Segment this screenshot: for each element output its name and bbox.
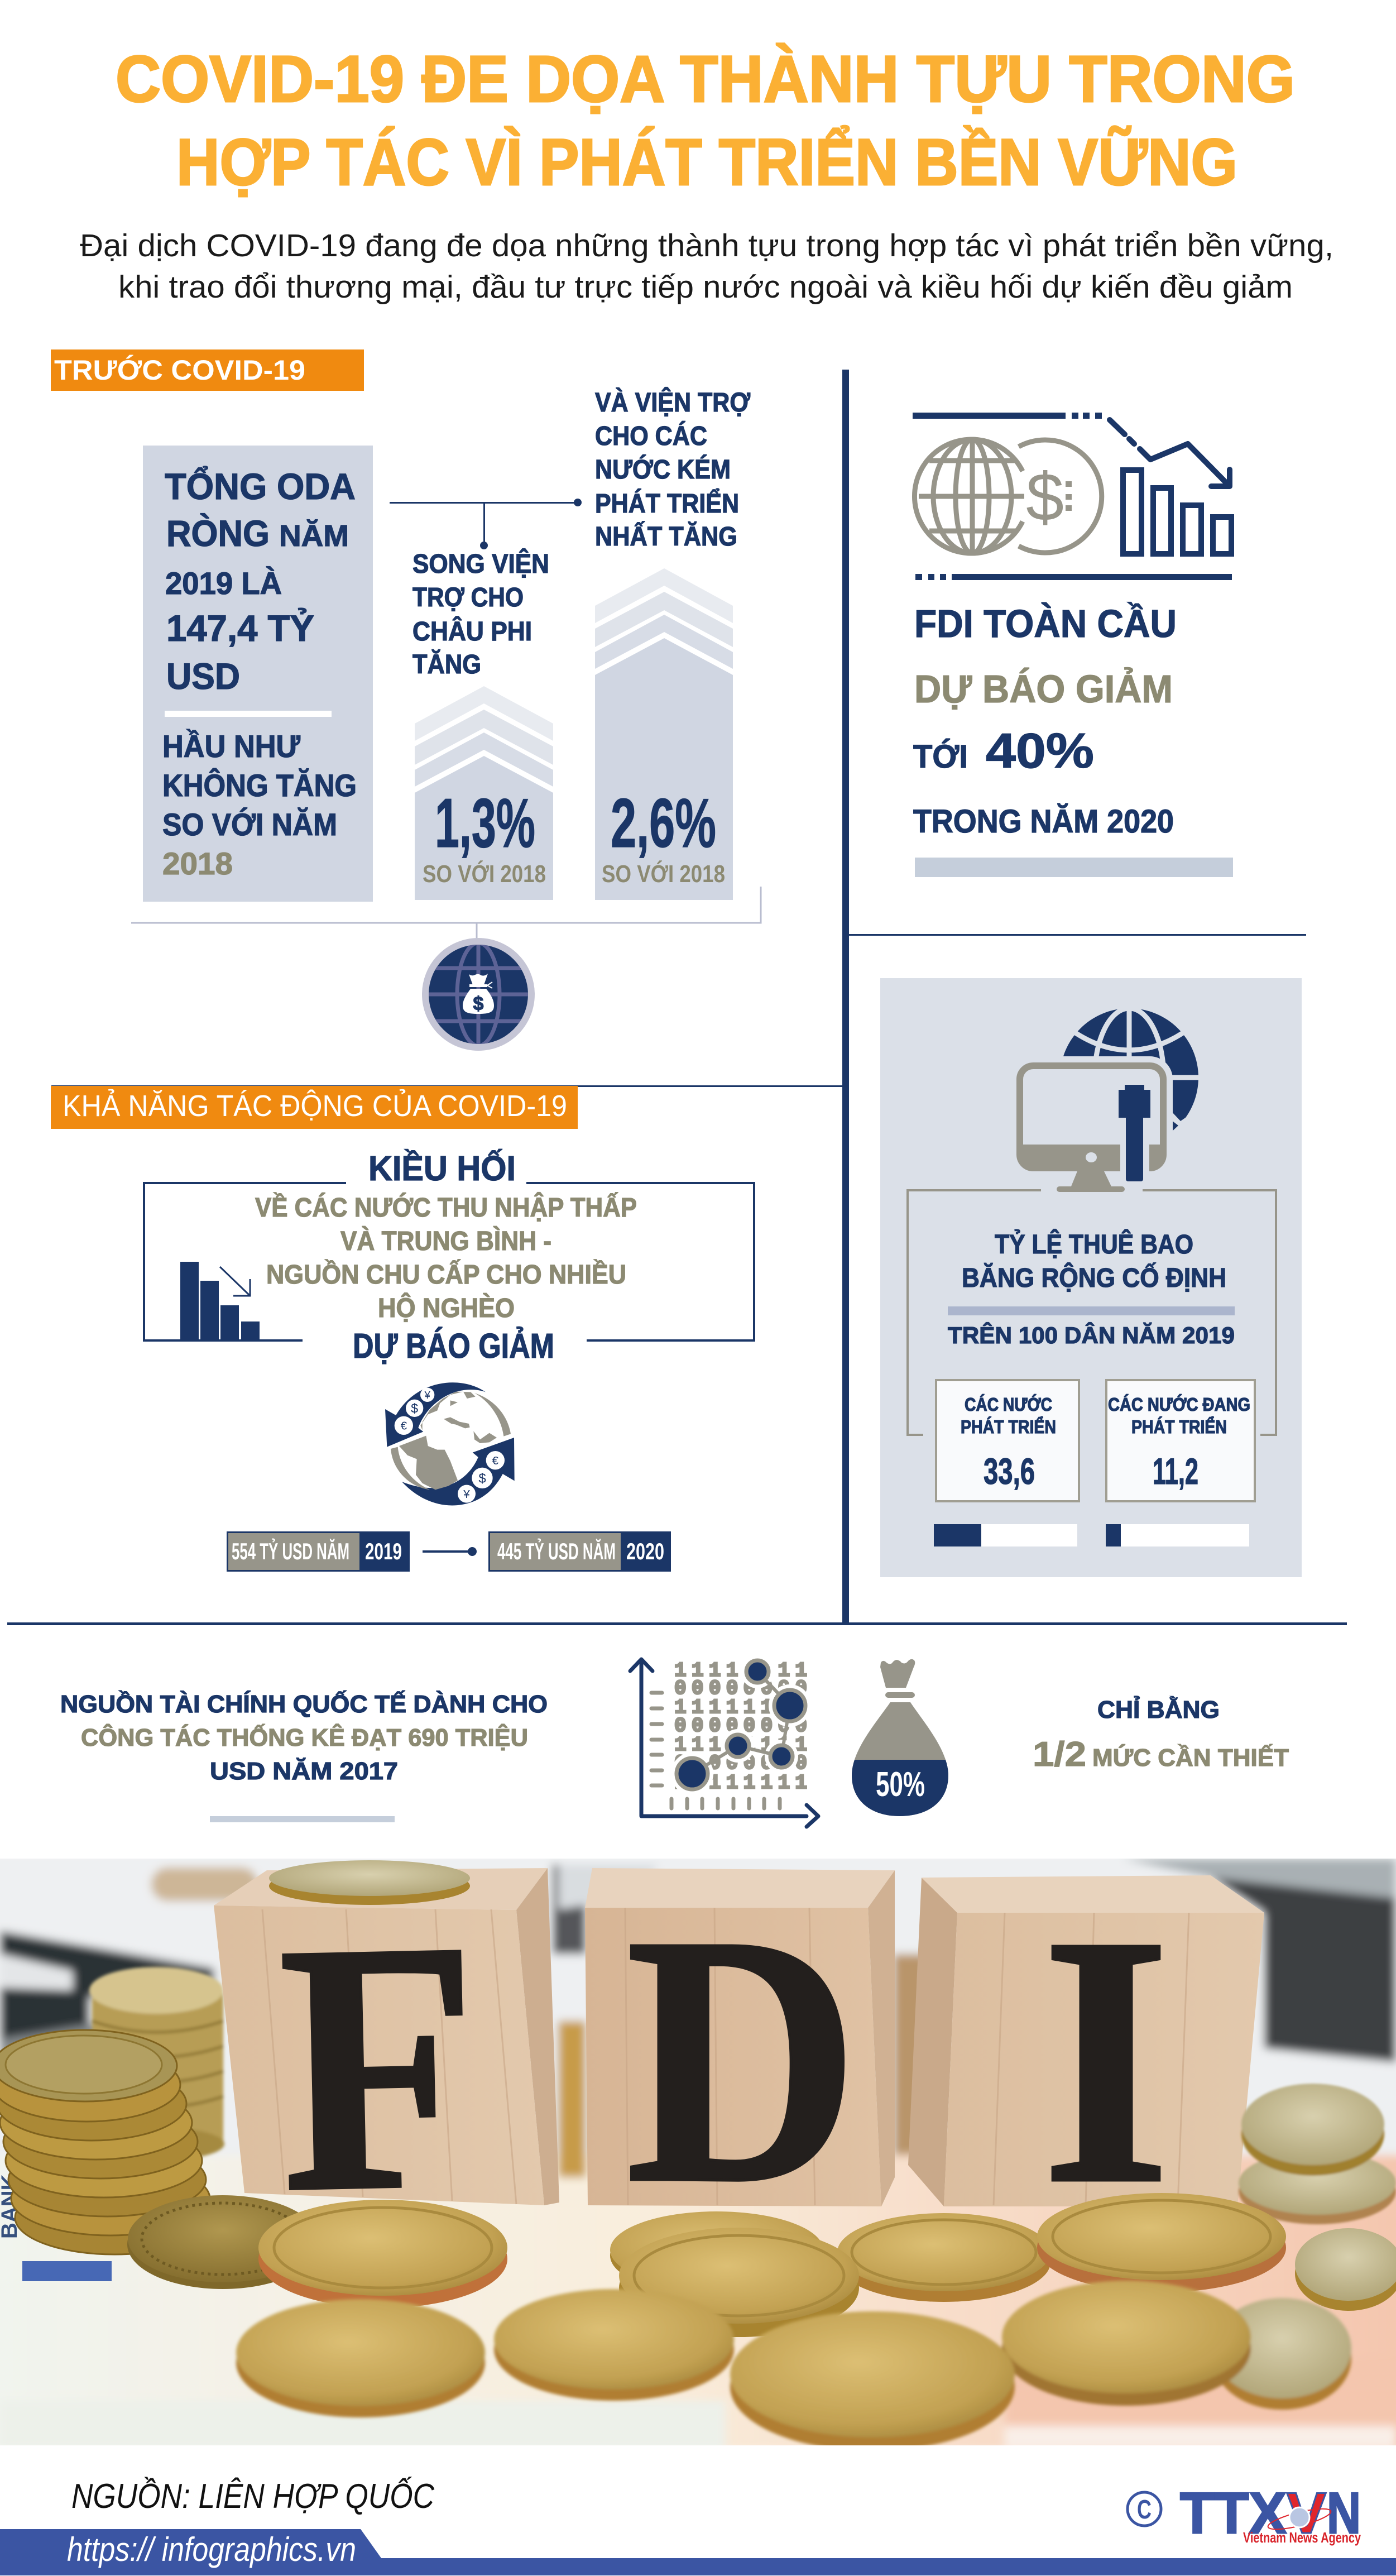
text: aid to Africa: SONG VIỆN — [412, 548, 549, 579]
icon: FDI globe, coin and falling chart: $ — [1026, 459, 1064, 535]
footer band with URL: https:// infographics.vn — [67, 2531, 356, 2568]
icon: data chart: 11111111 — [674, 1771, 807, 1794]
stat card: developing countries — [1106, 1380, 1255, 1501]
value label: 554 billion USD in 2019: 554 TỶ USD NĂM — [232, 1538, 349, 1564]
panel: fixed broadband subscriptions — [880, 978, 1302, 1577]
logo: TTXVN: Vietnam News Agency — [1243, 2529, 1361, 2546]
text: only half of what is needed: 1/2 — [1033, 1735, 1086, 1774]
panel: total ODA: TỔNG ODA — [165, 466, 356, 507]
wooden block I — [908, 1875, 1264, 2206]
connector lines with dots — [390, 499, 582, 549]
block letters: D — [626, 1862, 859, 2257]
text: international statistics funding — [60, 1689, 548, 1785]
text: global FDI forecast: TỚI — [913, 739, 968, 775]
source credit: NGUỒN: LIÊN HỢP QUỐC — [71, 2477, 435, 2516]
panel: total ODA: 147,4 TỶ — [166, 607, 314, 649]
value label: 554 billion USD in 2019: 2019 — [365, 1538, 402, 1564]
icon: globe with currency arrows: ¥ — [424, 1389, 430, 1401]
text: aid to least developed countries: CHO CÁC — [595, 421, 707, 451]
panel: total ODA: HẦU NHƯ — [162, 729, 300, 764]
text: global FDI forecast: FDI TOÀN CẦU — [914, 602, 1177, 645]
bracket under ODA panels — [131, 887, 761, 939]
left coin stack — [0, 2030, 214, 2254]
banknote detail — [22, 2261, 112, 2281]
chevron bar: 1.3%: 1,3% — [435, 785, 535, 862]
broadband heading: BĂNG RỘNG CỐ ĐỊNH — [962, 1262, 1226, 1293]
mid row coins — [127, 2193, 1396, 2337]
stat card: developed countries: CÁC NƯỚC — [965, 1394, 1052, 1415]
logo: TTXVN — [1128, 2481, 1361, 2546]
title: HỢP TÁC VÌ PHÁT TRIỂN BỀN VỮNG — [176, 125, 1237, 199]
foreground blurred coins — [236, 2281, 1351, 2451]
block letters: F — [276, 1867, 482, 2267]
wooden block D — [585, 1868, 895, 2206]
box frame: remittances — [144, 1183, 754, 1340]
icon: globe with money bag: $ — [473, 993, 484, 1014]
icon: globe with currency arrows: € — [492, 1454, 499, 1467]
icon: data chart: 00000000 — [674, 1752, 807, 1775]
broadband heading — [948, 1229, 1235, 1348]
coin on top of block — [269, 1860, 470, 1905]
stat card: developed countries — [936, 1380, 1079, 1501]
panel: total ODA: RÒNG — [166, 513, 270, 554]
main horizontal divider — [7, 1622, 1347, 1625]
main vertical divider — [842, 370, 849, 1624]
panel: total ODA: SO VỚI NĂM — [162, 807, 337, 842]
text: aid to least developed countries: NƯỚC KÉM — [595, 454, 731, 485]
panel: total ODA: 2019 LÀ — [165, 566, 282, 601]
photo background — [0, 1854, 1396, 2451]
intro text: Đại dịch COVID-19 đang đe dọa những thành tựu trong hợp tác vì phát triển bền vững, — [80, 228, 1333, 264]
text: remittances — [255, 1150, 637, 1366]
text: remittances: NGUỒN CHU CẤP CHO NHIỀU — [266, 1259, 626, 1290]
icon: data chart — [630, 1655, 818, 1827]
icon: globe with money bag — [422, 938, 535, 1051]
logo: TTXVN: C — [1137, 2495, 1152, 2525]
wooden block F — [214, 1868, 559, 2205]
chevron bar: 1.3% — [415, 686, 553, 900]
text: international statistics funding: CÔNG TÁC THỐNG KÊ ĐẠT 690 TRIỆU — [81, 1723, 528, 1751]
panel: total ODA: NĂM — [279, 519, 349, 553]
thin divider right — [849, 934, 1306, 936]
stat card: developed countries: 33,6 — [984, 1450, 1035, 1492]
text: remittances: VỀ CÁC NƯỚC THU NHẬP THẤP — [255, 1192, 637, 1223]
chevron bar: 2.6%: 2,6% — [611, 785, 716, 862]
icon: globe with currency arrows: ¥ — [463, 1488, 470, 1501]
chevron bar: 2.6%: SO VỚI 2018 — [602, 860, 725, 888]
value label: 445 billion USD in 2020: 2020 — [626, 1538, 664, 1564]
chevron bar: 2.6% — [595, 568, 733, 900]
progress bar: 11.2 — [1106, 1524, 1249, 1546]
stat card: developing countries: CÁC NƯỚC ĐANG — [1108, 1394, 1250, 1415]
title — [116, 42, 1295, 199]
icon: data chart: 11111111 — [674, 1734, 807, 1756]
text: only half of what is needed: MỨC CẦN THIẾT — [1092, 1744, 1289, 1771]
bracket frame — [908, 1190, 1276, 1435]
icon: data chart: 00000000 — [674, 1715, 807, 1737]
text: aid to least developed countries: PHÁT TRIỂN — [595, 489, 739, 519]
text: international statistics funding: USD NĂM 2017 — [210, 1757, 398, 1785]
icon: data chart: 11111111 — [674, 1659, 807, 1682]
photo: FDI wooden blocks and coins — [0, 1854, 1396, 2451]
text: remittances: VÀ TRUNG BÌNH - — [340, 1226, 551, 1256]
broadband heading: TỶ LỆ THUÊ BAO — [995, 1229, 1193, 1260]
title: COVID-19 ĐE DỌA THÀNH TỰU TRONG — [116, 42, 1295, 116]
text: remittances: HỘ NGHÈO — [378, 1292, 515, 1323]
back coin stack — [89, 1967, 224, 2161]
text: aid to Africa: TĂNG — [412, 649, 481, 679]
intro text — [80, 228, 1333, 305]
broadband heading: TRÊN 100 DÂN NĂM 2019 — [948, 1321, 1235, 1348]
icon: money bag 50%: 50% — [876, 1765, 925, 1804]
text: aid to Africa — [412, 548, 549, 679]
pale coins on the right — [1239, 2084, 1396, 2224]
value label: 445 billion USD in 2020 — [488, 1531, 671, 1572]
progress bar: 33.6 — [934, 1524, 1077, 1546]
icon: data chart: 00000000 — [674, 1677, 807, 1700]
chevron bar: 1.3%: SO VỚI 2018 — [423, 860, 546, 888]
footer band with URL — [0, 2529, 1396, 2575]
text: only half of what is needed — [1033, 1696, 1289, 1774]
accent bar under FDI text — [915, 858, 1233, 877]
icon: globe with currency arrows — [385, 1382, 515, 1505]
icon: money bag 50% — [852, 1659, 948, 1816]
panel: total ODA — [143, 446, 373, 902]
panel: total ODA: USD — [166, 655, 240, 697]
text: aid to least developed countries: NHẤT TĂNG — [595, 521, 737, 552]
text: only half of what is needed: CHỈ BẰNG — [1097, 1696, 1220, 1723]
text: aid to Africa: TRỢ CHO — [412, 583, 524, 612]
value label: 445 billion USD in 2020: 445 TỶ USD NĂM — [497, 1538, 616, 1564]
stat card: developing countries: 11,2 — [1153, 1450, 1198, 1492]
logo: TTXVN: V — [1287, 2481, 1326, 2546]
icon: falling bars with arrow — [180, 1262, 260, 1340]
text: aid to least developed countries: VÀ VIỆN TRỢ — [595, 387, 750, 418]
icon: globe with currency arrows: $ — [478, 1471, 486, 1486]
text: remittances: DỰ BÁO GIẢM — [353, 1327, 554, 1366]
intro text: khi trao đổi thương mại, đầu tư trực tiếp nước ngoài và kiều hối dự kiến đều giảm — [118, 269, 1293, 305]
text: remittances: KIỀU HỐI — [368, 1150, 516, 1188]
block letters — [276, 1862, 1170, 2267]
stat card: developing countries: PHÁT TRIỂN — [1131, 1416, 1227, 1437]
icon: data chart: 11111111 — [674, 1696, 807, 1719]
block letters: I — [1042, 1862, 1170, 2258]
section heading: possible impact of COVID-19: KHẢ NĂNG TÁC ĐỘNG CỦA COVID-19 — [63, 1089, 567, 1123]
section heading: before COVID-19 — [51, 349, 364, 391]
icon: globe with currency arrows: € — [401, 1420, 407, 1433]
text: aid to least developed countries — [595, 387, 750, 552]
accent bar under statistics text — [210, 1816, 395, 1822]
section heading: before COVID-19: TRƯỚC COVID-19 — [54, 355, 305, 386]
text: global FDI forecast — [913, 602, 1177, 840]
text: global FDI forecast: 40% — [986, 723, 1094, 778]
text: global FDI forecast: DỰ BÁO GIẢM — [914, 667, 1173, 711]
logo: TTXVN: TTX — [1180, 2481, 1287, 2546]
panel: total ODA: KHÔNG TĂNG — [162, 768, 357, 803]
icon: globe with currency arrows: $ — [411, 1401, 418, 1416]
value label: 554 billion USD in 2019 — [227, 1531, 410, 1572]
divider left — [51, 1085, 842, 1087]
logo: TTXVN: N — [1327, 2481, 1361, 2546]
panel: total ODA: 2018 — [162, 846, 233, 881]
text: global FDI forecast: TRONG NĂM 2020 — [913, 803, 1174, 840]
arrow connector between values — [423, 1547, 477, 1556]
icon: globe and monitor with cable — [1020, 1005, 1206, 1192]
text: international statistics funding: NGUỒN TÀI CHÍNH QUỐC TẾ DÀNH CHO — [60, 1689, 548, 1718]
stat card: developed countries: PHÁT TRIỂN — [961, 1416, 1056, 1437]
icon: FDI globe, coin and falling chart — [913, 413, 1232, 580]
text: aid to Africa: CHÂU PHI — [412, 616, 532, 647]
